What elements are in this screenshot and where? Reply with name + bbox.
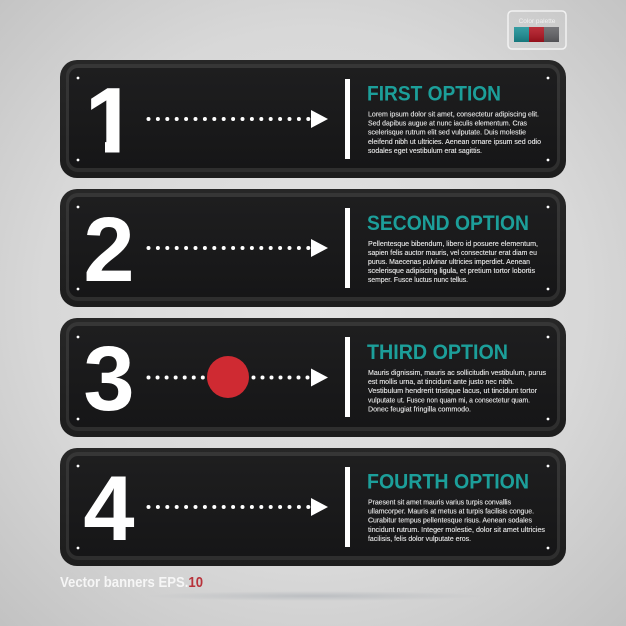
body text: Praesent sit amet mauris varius turpis convallis: [368, 498, 511, 506]
red circle: [207, 356, 249, 398]
body text: purus. Maecenas pulvinar ultricies imperdiet. Aenean: [368, 257, 530, 266]
body text: Mauris dignissim, mauris ac sollicitudin vestibulum, purus: [368, 368, 546, 377]
body text: Sed dapibus augue at nunc iaculis elementum. Cras: [368, 119, 527, 128]
divider: [345, 208, 350, 288]
body text: sapien felis auctor mauris, vel consectetur erat diam eu: [368, 248, 537, 257]
body text: [368, 498, 545, 543]
color palette: [508, 11, 566, 49]
body text: Curabitur tempus pellentesque risus. Aenean sodales: [368, 516, 532, 525]
panel: first option: [60, 60, 566, 178]
caption: Vector banners EPS.10: [60, 574, 203, 591]
body text: scelerisque adipiscing ligula, et pretium tortor lobortis: [368, 266, 535, 275]
shadow below panels: [145, 591, 485, 601]
number 3: 3: [83, 328, 135, 430]
dotted arrow with red circle: [148, 356, 328, 398]
body text: tincidunt rutrum. Integer molestie, dolor sit amet ultricies: [368, 525, 545, 534]
divider: [345, 337, 350, 417]
divider: [345, 79, 350, 159]
number 1: 1: [85, 70, 137, 172]
body text: Donec feugiat fringilla commodo.: [368, 404, 471, 413]
dotted arrow: [148, 498, 328, 516]
body text: est mollis urna, at tincidunt ante justo nec nibh.: [368, 377, 514, 386]
panel: third option: [60, 318, 566, 437]
dotted arrow: [148, 110, 328, 128]
body text: Pellentesque bibendum, libero id posuere elementum,: [368, 239, 538, 248]
number 4: 4: [83, 458, 135, 560]
body text: [368, 110, 541, 155]
panel: fourth option: [60, 448, 566, 566]
heading: THIRD OPTION: [367, 340, 508, 364]
body text: sodales eget vestibulum erat sagittis.: [368, 146, 482, 155]
body text: ullamcorper. Mauris at metus at turpis facilisis congue.: [368, 507, 534, 516]
number 2: 2: [83, 199, 135, 301]
body text: Vestibulum hendrerit tristique lacus, ut tincidunt tortor: [368, 386, 537, 395]
body text: facilisis, felis dolor vulputate eros.: [368, 534, 471, 543]
body text: [368, 239, 538, 284]
palette label: Color palette: [519, 18, 556, 25]
body text: semper. Fusce luctus nunc tellus.: [368, 275, 468, 284]
heading: FIRST OPTION: [367, 82, 501, 106]
heading: SECOND OPTION: [367, 211, 529, 235]
panel: second option: [60, 189, 566, 307]
body text: scelerisque rutrum elit sed vulputate. Duis molestie: [368, 128, 526, 137]
divider: [345, 467, 350, 547]
dotted arrow: [148, 239, 328, 257]
body text: vulputate ut. Fusce non quam mi, a consectetur quam.: [368, 395, 530, 404]
palette swatches: [514, 27, 559, 42]
body text: Lorem ipsum dolor sit amet, consectetur adipiscing elit.: [368, 110, 539, 118]
body text: eleifend nibh ut ultricies. Aenean ornare ipsum sed odio: [368, 137, 541, 146]
heading: FOURTH OPTION: [367, 470, 529, 494]
body text: [368, 368, 546, 413]
